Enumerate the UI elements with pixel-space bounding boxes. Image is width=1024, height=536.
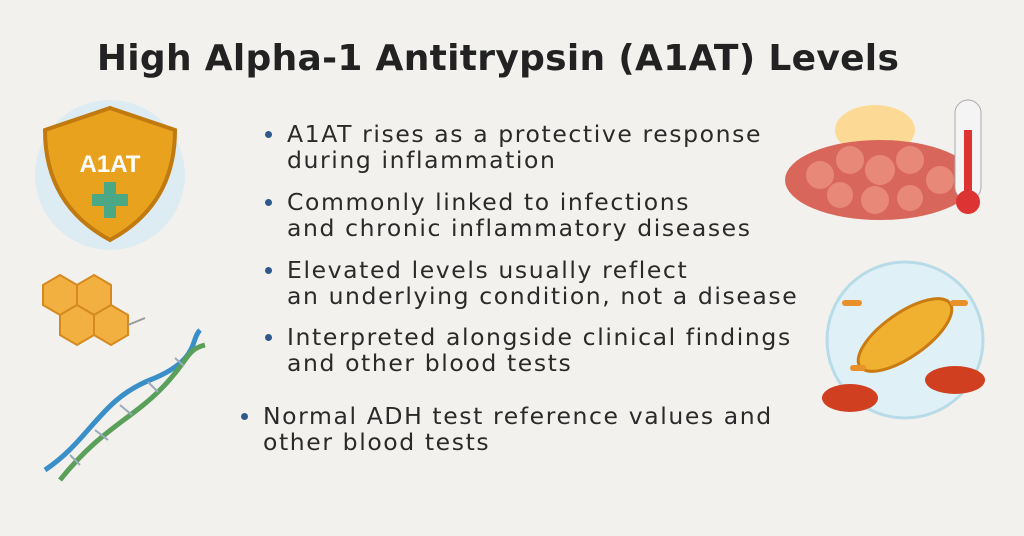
bullet 5 — [263, 403, 773, 455]
bullet 1 — [287, 121, 762, 173]
icon: DNA — [45, 330, 205, 480]
title: High Alpha-1 Antitrypsin (A1AT) Levels — [97, 38, 899, 79]
bullet 4: and other blood tests — [287, 349, 572, 377]
icon: inflamed tissue with thermometer — [785, 100, 981, 220]
bullet 2: Commonly linked to infections — [287, 188, 690, 216]
bullet 3: Elevated levels usually reflect — [287, 256, 688, 284]
bullet 4: Interpreted alongside clinical findings — [287, 323, 792, 351]
bullet 5: Normal ADH test reference values and — [263, 402, 773, 430]
bullet 4 — [287, 324, 792, 376]
bullet 1: during inflammation — [287, 146, 557, 174]
icon: shield: A1AT — [80, 151, 141, 178]
icon: shield — [35, 100, 185, 250]
icon: bacteria — [822, 262, 985, 418]
bullet 2: and chronic inflammatory diseases — [287, 214, 752, 242]
bullet 3: an underlying condition, not a disease — [287, 282, 798, 310]
bullet 5: other blood tests — [263, 428, 490, 456]
bullet 3 — [287, 257, 798, 309]
bullet 1: A1AT rises as a protective response — [287, 120, 762, 148]
icon: hexagons — [43, 275, 145, 345]
bullet 2 — [287, 189, 752, 241]
